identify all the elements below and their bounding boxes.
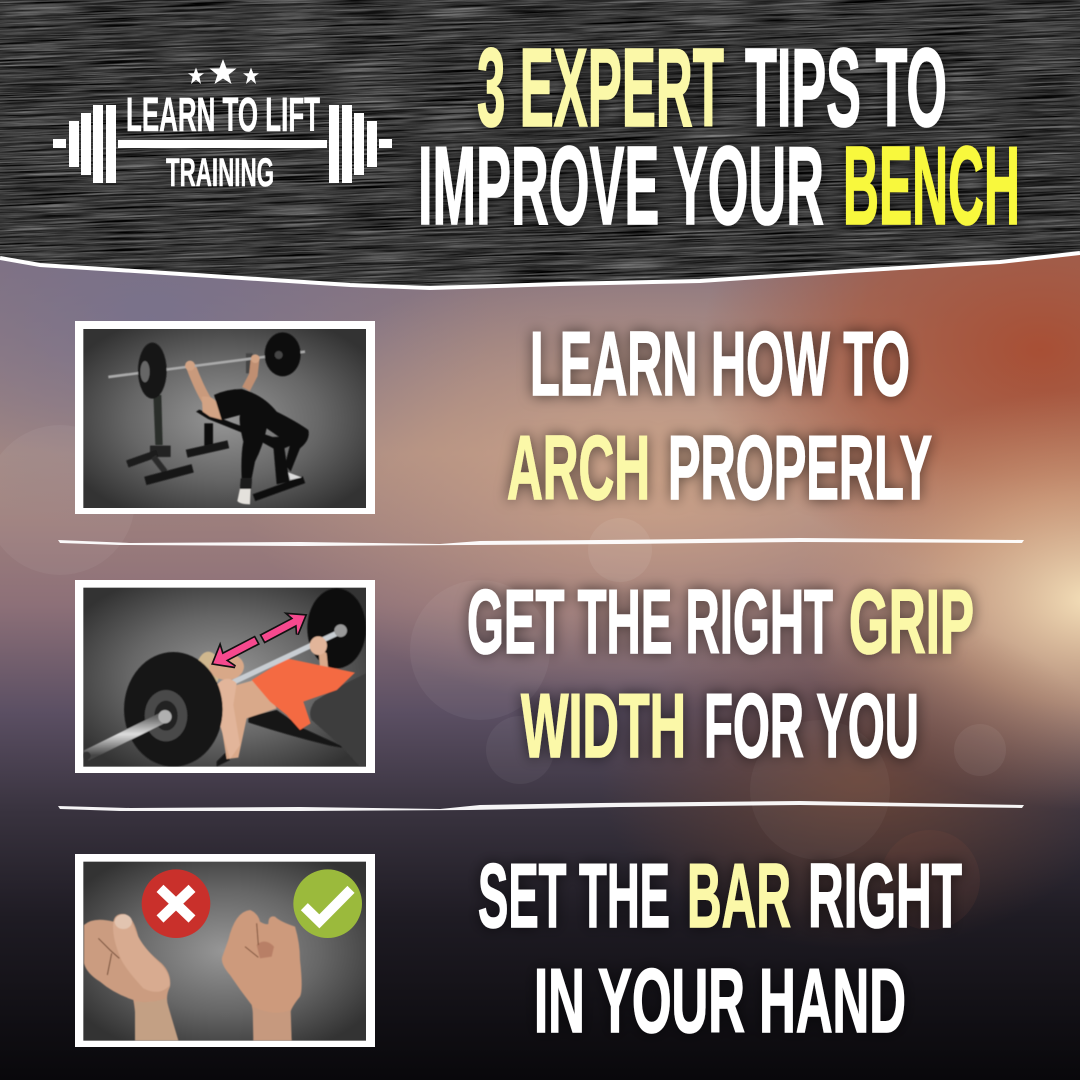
tip 2 text: WIDTH xyxy=(521,676,686,777)
squat stand xyxy=(153,395,163,445)
panel: tip 2 photo, grip width xyxy=(75,580,375,773)
icon: green check xyxy=(293,869,362,938)
near bar sleeve xyxy=(86,717,165,756)
icon: three stars xyxy=(188,59,259,84)
icon: red cross xyxy=(142,869,210,938)
far plate xyxy=(307,588,366,668)
bench xyxy=(248,710,347,748)
tip 3 text: SET THE xyxy=(478,846,670,947)
hair and face xyxy=(198,651,219,683)
tip 1 text: ARCH xyxy=(507,418,650,519)
torso and far arm xyxy=(218,678,277,759)
tip 3 text: BAR xyxy=(687,846,791,947)
leg xyxy=(310,673,366,767)
logo wordmark: LEARN TO LIFT xyxy=(126,89,320,142)
tip 2 text: GRIP xyxy=(849,572,974,673)
bar xyxy=(232,631,338,684)
near plate xyxy=(124,652,223,767)
panel: tip 3 photo, hand position xyxy=(75,854,375,1047)
tip 2 text xyxy=(467,572,974,777)
shirt xyxy=(252,658,355,730)
panel: tip 1 photo, bench press arch xyxy=(75,321,375,514)
logo: Learn to Lift Training xyxy=(53,59,392,195)
icon: barbell xyxy=(53,105,392,183)
divider xyxy=(58,538,1024,546)
icon: pink double arrow xyxy=(213,614,305,667)
header: dark wood texture band xyxy=(0,0,1080,290)
tip 1 text xyxy=(507,314,932,519)
logo subtitle: TRAINING xyxy=(166,151,274,195)
torso and legs xyxy=(202,396,223,420)
tip 3 text xyxy=(478,846,962,1052)
arms xyxy=(246,353,253,373)
front bench xyxy=(196,410,295,451)
divider xyxy=(58,801,1024,811)
hands xyxy=(310,636,327,655)
title xyxy=(418,26,1020,248)
barbell xyxy=(108,352,305,377)
right hand, correct xyxy=(222,910,302,1041)
left hand, wrong xyxy=(84,914,178,1041)
title: 3 EXPERT xyxy=(477,26,724,150)
